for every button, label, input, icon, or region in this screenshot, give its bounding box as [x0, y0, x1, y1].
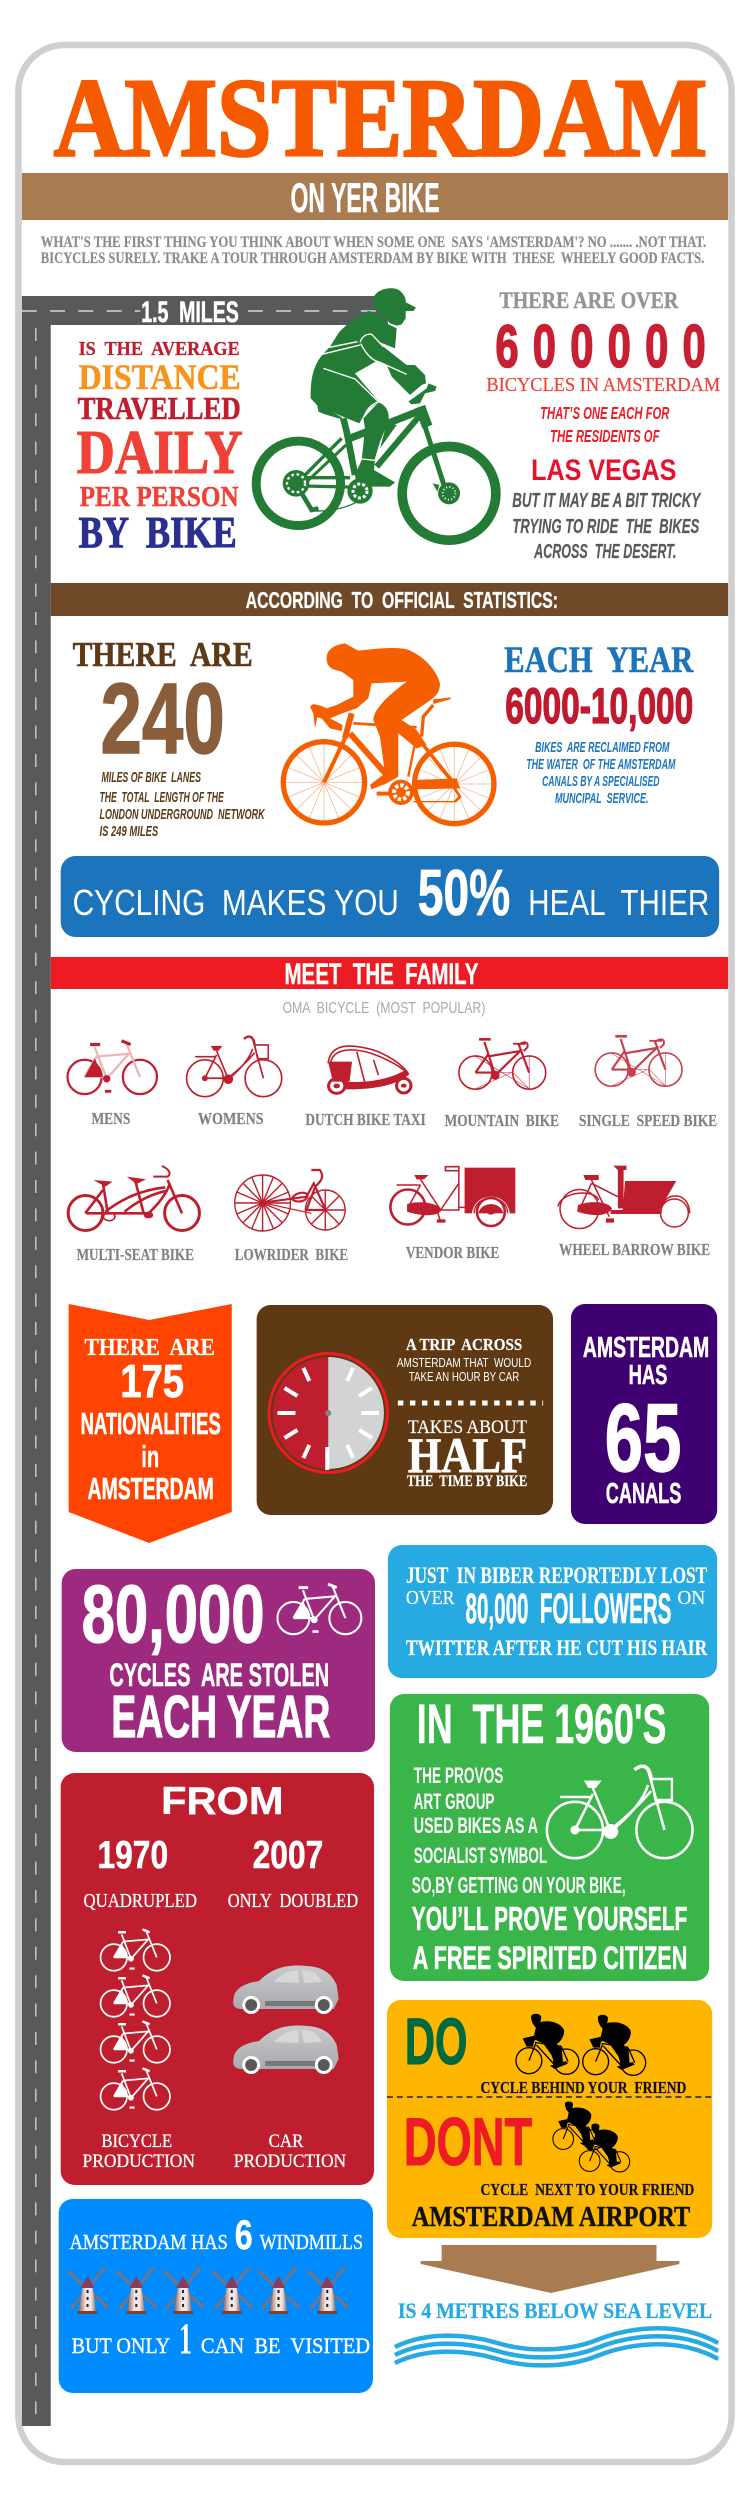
- icon: water waves: [395, 2328, 718, 2365]
- text block: 240 miles: THERE ARE: [73, 635, 253, 674]
- panel: windmills: WINDMILLS: [260, 2230, 363, 2254]
- icon: windmill 2: [116, 2267, 157, 2314]
- text block: 240 miles: MILES OF BIKE LANES: [101, 770, 201, 786]
- panel: production 1970 to 2007: QUADRUPLED: [84, 1890, 197, 1912]
- panel: production 1970 to 2007: 1970: [97, 1834, 168, 1877]
- icon: mens bike: [68, 1041, 157, 1094]
- panel: canals: HAS: [629, 1359, 667, 1390]
- panel: production 1970 to 2007: CAR: [269, 2131, 304, 2152]
- panel: half the time: AMSTERDAM THAT WOULD: [397, 1355, 531, 1370]
- text block: 600000 bicycles: THERE ARE OVER: [499, 288, 679, 314]
- icon: windmill 6: [307, 2267, 348, 2314]
- icon: green cyclist: [256, 288, 496, 540]
- label: vendor bike: VENDOR BIKE: [406, 1243, 499, 1262]
- icon: cyclist do 1: [516, 2014, 579, 2074]
- text block: each year: EACH YEAR: [504, 639, 694, 680]
- text block: average distance: DAILY: [77, 419, 243, 487]
- text block: each year: MUNCIPAL SERVICE.: [555, 791, 649, 807]
- callout: cycling 50% healthier: CYCLING MAKES YOU: [73, 883, 399, 923]
- panel: production 1970 to 2007: PRODUCTION: [83, 2151, 195, 2172]
- panel: windmills: [59, 2199, 373, 2393]
- subtitle banner: [22, 173, 728, 221]
- panel: canals: [571, 1304, 717, 1524]
- family banner: [51, 957, 728, 991]
- icon: vendor bike: [390, 1167, 515, 1226]
- panel: do and dont: DONT: [404, 2105, 532, 2180]
- icon: windmill 3: [163, 2267, 204, 2314]
- panel: production 1970 to 2007: PRODUCTION: [234, 2151, 346, 2172]
- icon: bicycle 3: [101, 2021, 170, 2063]
- icon: white bike: [277, 1584, 361, 1634]
- panel: do and dont: CYCLE BEHIND YOUR FRIEND: [480, 2078, 686, 2097]
- panel: windmills: AMSTERDAM HAS: [70, 2230, 228, 2254]
- panel: half the time: TAKE AN HOUR BY CAR: [409, 1369, 519, 1384]
- icon: cyclist dont 2: [579, 2123, 630, 2172]
- text block: 240 miles: IS 249 MILES: [99, 824, 158, 840]
- icon: windmill 1: [68, 2267, 108, 2314]
- label: dutch bike taxi: DUTCH BIKE TAXI: [305, 1110, 426, 1129]
- callout: cycling 50% healthier: 50%: [418, 856, 510, 929]
- statistics banner: ACCORDING TO OFFICIAL STATISTICS:: [246, 587, 558, 613]
- panel: cycles stolen: 80,000: [82, 1569, 265, 1660]
- label: multi-seat bike: MULTI-SEAT BIKE: [77, 1245, 194, 1264]
- panel: nationalities: THERE ARE: [85, 1334, 215, 1361]
- panel: cycles stolen: [62, 1569, 375, 1752]
- panel: half the time: [257, 1305, 553, 1515]
- panel: nationalities: in: [141, 1439, 159, 1474]
- callout: cycling 50% healthier: HEAL THIER: [528, 883, 709, 923]
- text block: 600000 bicycles: 600000: [495, 312, 720, 380]
- panel: 1960s provos: [390, 1692, 709, 1981]
- text block: 240 miles: LONDON UNDERGROUND NETWORK: [99, 807, 266, 823]
- label: single speed bike: SINGLE SPEED BIKE: [579, 1111, 717, 1130]
- text block: 600000 bicycles: [486, 288, 720, 563]
- panel: half the time: TAKES ABOUT: [408, 1417, 528, 1438]
- text block: each year: [504, 639, 694, 807]
- panel: production 1970 to 2007: ONLY DOUBLED: [228, 1890, 358, 1912]
- icon: car 1: [233, 1966, 339, 2014]
- icon: clock: [269, 1354, 387, 1472]
- statistics banner: [51, 583, 728, 616]
- icon: orange cyclist: [283, 643, 494, 824]
- text block: each year: BIKES ARE RECLAIMED FROM: [535, 740, 670, 756]
- icon: dutch bike taxi: [328, 1046, 411, 1093]
- text block: average distance: PER PERSON: [80, 481, 239, 513]
- panel: canals: CANALS: [606, 1478, 681, 1510]
- panel: justin bieber: [388, 1545, 717, 1678]
- panel: 1960s provos: SOCIALIST SYMBOL: [414, 1843, 547, 1868]
- panel: half the time: HALF: [408, 1428, 527, 1483]
- text block: average distance: [77, 338, 243, 557]
- panel: half the time: THE TIME BY BIKE: [407, 1473, 527, 1490]
- icon: single speed bike: [595, 1036, 682, 1086]
- panel: canals: 65: [605, 1383, 681, 1492]
- panel: cycles stolen: EACH YEAR: [111, 1685, 330, 1750]
- panel: cycles stolen: CYCLES ARE STOLEN: [109, 1657, 329, 1693]
- label: mens: MENS: [92, 1109, 130, 1128]
- text block: average distance: TRAVELLED: [78, 391, 241, 426]
- panel: nationalities: AMSTERDAM: [88, 1471, 214, 1506]
- icon: bicycle 1: [101, 1929, 170, 1971]
- text block: average distance: DISTANCE: [79, 357, 241, 397]
- panel: nationalities: NATIONALITIES: [81, 1406, 221, 1441]
- icon: windmill 4: [212, 2267, 253, 2314]
- icon: car 2: [233, 2026, 339, 2074]
- label: lowrider bike: LOWRIDER BIKE: [235, 1245, 348, 1264]
- panel: production 1970 to 2007: 2007: [253, 1834, 323, 1877]
- panel: half the time: A TRIP ACROSS: [406, 1335, 522, 1354]
- label: womens: WOMENS: [198, 1109, 264, 1128]
- label: mountain bike: MOUNTAIN BIKE: [445, 1111, 559, 1130]
- icon: mountain bike: [459, 1039, 546, 1089]
- panel: do and dont: [387, 2000, 712, 2238]
- panel: 1960s provos: USED BIKES AS A: [414, 1813, 538, 1838]
- text block: 240 miles: 240: [100, 664, 225, 775]
- subheading: oma bicycle: OMA BICYCLE (MOST POPULAR): [282, 1000, 485, 1017]
- panel: nationalities: [69, 1304, 232, 1543]
- text block: 600000 bicycles: THAT’S ONE EACH FOR: [540, 403, 670, 423]
- panel: nationalities: 175: [120, 1355, 184, 1407]
- panel: production 1970 to 2007: FROM: [161, 1780, 283, 1823]
- label: wheel barrow bike: WHEEL BARROW BIKE: [559, 1240, 710, 1259]
- panel: do and dont: DO: [405, 2004, 468, 2078]
- icon: multi-seat bike: [68, 1166, 199, 1230]
- text block: 600000 bicycles: THE RESIDENTS OF: [550, 426, 660, 446]
- text: sea level: IS 4 METRES BELOW SEA LEVEL: [398, 2298, 712, 2323]
- text block: average distance: IS THE AVERAGE: [79, 338, 240, 360]
- text block: 600000 bicycles: LAS VEGAS: [531, 454, 676, 487]
- panel: do and dont: AMSTERDAM AIRPORT: [412, 2201, 690, 2233]
- panel: do and dont: CYCLE NEXT TO YOUR FRIEND: [480, 2180, 694, 2199]
- text block: each year: CANALS BY A SPECIALISED: [542, 774, 660, 790]
- text block: 240 miles: [73, 635, 266, 840]
- text block: 240 miles: THE TOTAL LENGTH OF THE: [99, 790, 224, 806]
- arrow: down to sea level: [421, 2245, 679, 2293]
- icon: cyclist do 2: [583, 2015, 646, 2075]
- icon: cyclist dont 1: [553, 2101, 603, 2150]
- icon: windmill 5: [259, 2267, 299, 2314]
- panel: production 1970 to 2007: [61, 1773, 374, 2185]
- icon: bicycle 4: [101, 2068, 170, 2110]
- icon: womens bike: [187, 1037, 282, 1097]
- family banner: MEET THE FAMILY: [284, 958, 478, 991]
- panel: justin bieber: ON: [677, 1587, 705, 1609]
- road: [22, 296, 388, 2426]
- panel: windmills: BUT ONLY: [72, 2333, 170, 2358]
- panel: production 1970 to 2007: BICYCLE: [101, 2131, 172, 2152]
- panel: 1960s provos: THE PROVOS: [414, 1763, 503, 1788]
- panel: justin bieber: OVER: [406, 1587, 455, 1609]
- road label: 1.5 miles: 1.5 MILES: [141, 296, 239, 329]
- icon: white womens bike: [547, 1766, 693, 1858]
- icon: bicycle 2: [101, 1975, 170, 2017]
- panel: windmills: 6: [235, 2211, 253, 2258]
- icon: wheel barrow bike: [558, 1166, 690, 1228]
- text block: average distance: BY BIKE: [79, 509, 237, 557]
- panel: windmills: 1: [179, 2315, 192, 2363]
- text block: 600000 bicycles: BICYCLES IN AMSTERDAM: [486, 374, 720, 396]
- subtitle banner: ON YER BIKE: [290, 174, 440, 221]
- callout: cycling 50% healthier: [61, 856, 719, 937]
- panel: 1960s provos: ART GROUP: [414, 1789, 494, 1814]
- icon: lowrider bike: [235, 1170, 345, 1231]
- intro text: [41, 234, 706, 267]
- panel: windmills: CAN BE VISITED: [201, 2333, 370, 2358]
